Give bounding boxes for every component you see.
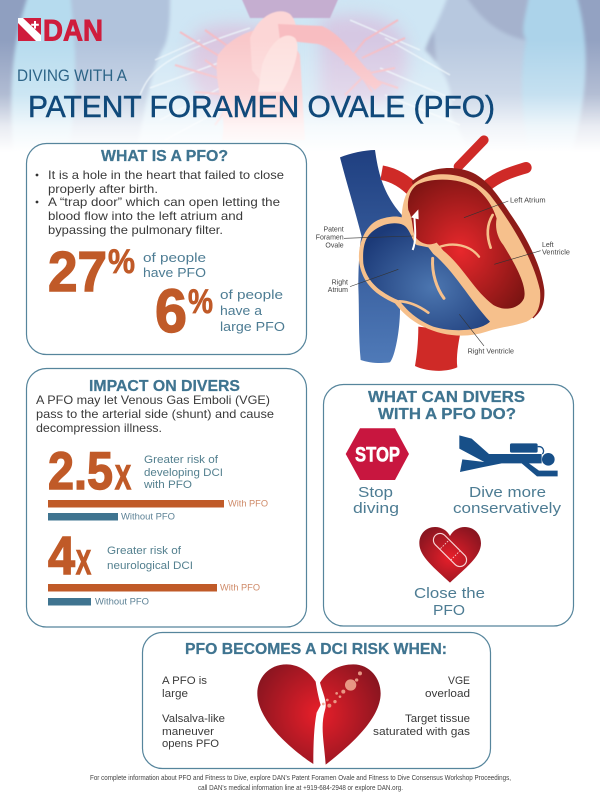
stat: 4x: Greater risk of (107, 545, 182, 557)
intro text: A PFO may let Venous Gas Emboli (VGE) (36, 393, 270, 407)
intro text: decompression illness. (36, 421, 162, 435)
left text: opens PFO (162, 738, 219, 750)
text: close the PFO: PFO (433, 603, 465, 619)
stat: 6 percent (155, 277, 285, 345)
arteries (382, 140, 526, 192)
heading: WHAT IS A PFO? (101, 148, 228, 165)
intro text: pass to the arterial side (shunt) and cause (36, 407, 274, 421)
stat: 4x (48, 526, 193, 586)
stat: 6 percent: % (188, 283, 213, 321)
diagram labels: Ovale (325, 242, 344, 249)
valve flaps (399, 215, 493, 313)
pulmonary trunk (415, 327, 461, 371)
footer: For complete information about PFO and Fitness to Dive, explore DAN's Patent Foramen Ovale and Fitness to Dive Consensus Workshop Proceedings, (90, 775, 511, 782)
diagram labels: Atrium (328, 287, 348, 294)
bullet list: properly after birth. (48, 182, 158, 196)
stat: 2.5x: developing DCI (144, 467, 223, 479)
left text: A PFO is (162, 675, 207, 687)
right text (373, 675, 470, 738)
bar chart: neurological DCI: With PFO (220, 582, 260, 594)
right text: saturated with gas (373, 726, 470, 738)
bar chart: neurological DCI: Without PFO (95, 596, 149, 608)
left text: maneuver (162, 726, 214, 738)
text: dive more conservatively (453, 485, 562, 517)
heart body (359, 174, 540, 336)
footer (90, 775, 511, 792)
stat: 27 percent (48, 240, 206, 304)
stat: 27 percent: of people (143, 250, 206, 265)
panel: PFO becomes a DCI risk (142, 632, 490, 768)
left text: large (162, 688, 188, 700)
text: stop diving: diving (353, 501, 399, 517)
stat: 4x: 4 (48, 526, 75, 586)
stat: 4x: X (76, 544, 91, 582)
heading (368, 389, 525, 423)
gas bubbles (322, 671, 362, 708)
stat: 6 percent: have a (220, 303, 263, 318)
stat: 4x: neurological DCI (107, 560, 193, 572)
text: close the PFO: Close the (414, 586, 485, 602)
diagram labels: Left Atrium (510, 198, 546, 205)
bar chart: developing DCI (48, 498, 268, 522)
icon: scuba diver (459, 435, 558, 476)
pink heart (217, 11, 382, 140)
bullet list: It is a hole in the heart that failed to close (48, 168, 284, 182)
stat: 2.5x (48, 442, 223, 501)
left text (162, 675, 225, 750)
outer wall (412, 168, 544, 318)
text: dive more conservatively: conservatively (453, 501, 562, 517)
panel: impact on divers (26, 368, 306, 627)
heading: WITH A PFO DO? (378, 406, 516, 423)
stat: 6 percent: 6 (155, 277, 187, 345)
stat: 2.5x: with PFO (143, 479, 192, 491)
bullet list: bypassing the pulmonary filter. (48, 223, 223, 237)
title: PATENT FORAMEN OVALE (PFO) (28, 89, 495, 124)
text: stop diving: Stop (358, 485, 393, 501)
diagram labels (316, 198, 570, 355)
diagram labels: Foramen (316, 235, 344, 242)
heart anatomy diagram (316, 140, 570, 371)
panel: what is a PFO (26, 144, 306, 354)
heading: PFO BECOMES A DCI RISK WHEN: (185, 641, 447, 658)
bullet list: blood flow into the left atrium and (48, 209, 243, 223)
title: DIVING WITH A (17, 66, 128, 85)
stat: 6 percent: large PFO (220, 319, 285, 334)
diagram labels: Left (542, 242, 554, 249)
logo: DAN (18, 14, 103, 48)
text: dive more conservatively: Dive more (469, 485, 546, 501)
background: anatomical chest illustration (0, 0, 600, 180)
bar chart: developing DCI: Without PFO (121, 512, 175, 522)
left text: Valsalva-like (162, 713, 225, 725)
right text: overload (425, 688, 470, 700)
title (17, 66, 495, 124)
diagram labels: Patent (323, 227, 344, 234)
stat: 6 percent: of people (220, 287, 283, 302)
bar chart: developing DCI: With PFO (228, 498, 268, 510)
footer: call DAN's medical information line at +919-684-2948 or explore DAN.org. (198, 785, 403, 792)
text: stop diving (353, 485, 399, 517)
intro text (36, 393, 274, 435)
icon: cracked heart (257, 664, 381, 765)
heading: IMPACT ON DIVERS (89, 378, 240, 395)
left chambers (408, 180, 525, 309)
text: close the PFO (414, 586, 485, 619)
right text: VGE (448, 675, 470, 687)
icon: heart with bandage (419, 527, 481, 583)
bullet list (36, 168, 284, 237)
stat: 27 percent: % (108, 243, 135, 281)
icon: stop sign: STOP (355, 444, 400, 466)
icon: stop sign (346, 428, 409, 480)
stat: 2.5x: 2.5 (48, 442, 113, 501)
stat: 27 percent: 27 (48, 240, 107, 304)
diagram labels: Right (332, 279, 348, 286)
logo: DAN: DAN (43, 14, 103, 48)
diagram labels: Ventricle (542, 250, 570, 257)
bar chart: neurological DCI (48, 582, 260, 608)
panel: what can divers do (324, 384, 574, 626)
diagram labels: Right Ventricle (468, 348, 514, 355)
callout lines (344, 201, 541, 346)
right chambers (363, 223, 490, 330)
bullet list: A “trap door” which can open letting the (48, 195, 280, 209)
stat: 2.5x: X (115, 459, 131, 497)
superior and inferior vena cava (340, 150, 407, 363)
stat: 2.5x: Greater risk of (144, 454, 219, 466)
right text: Target tissue (405, 713, 470, 725)
heading: WHAT CAN DIVERS (368, 389, 525, 406)
stat: 27 percent: have PFO (143, 265, 206, 280)
arrow through PFO (411, 209, 419, 250)
